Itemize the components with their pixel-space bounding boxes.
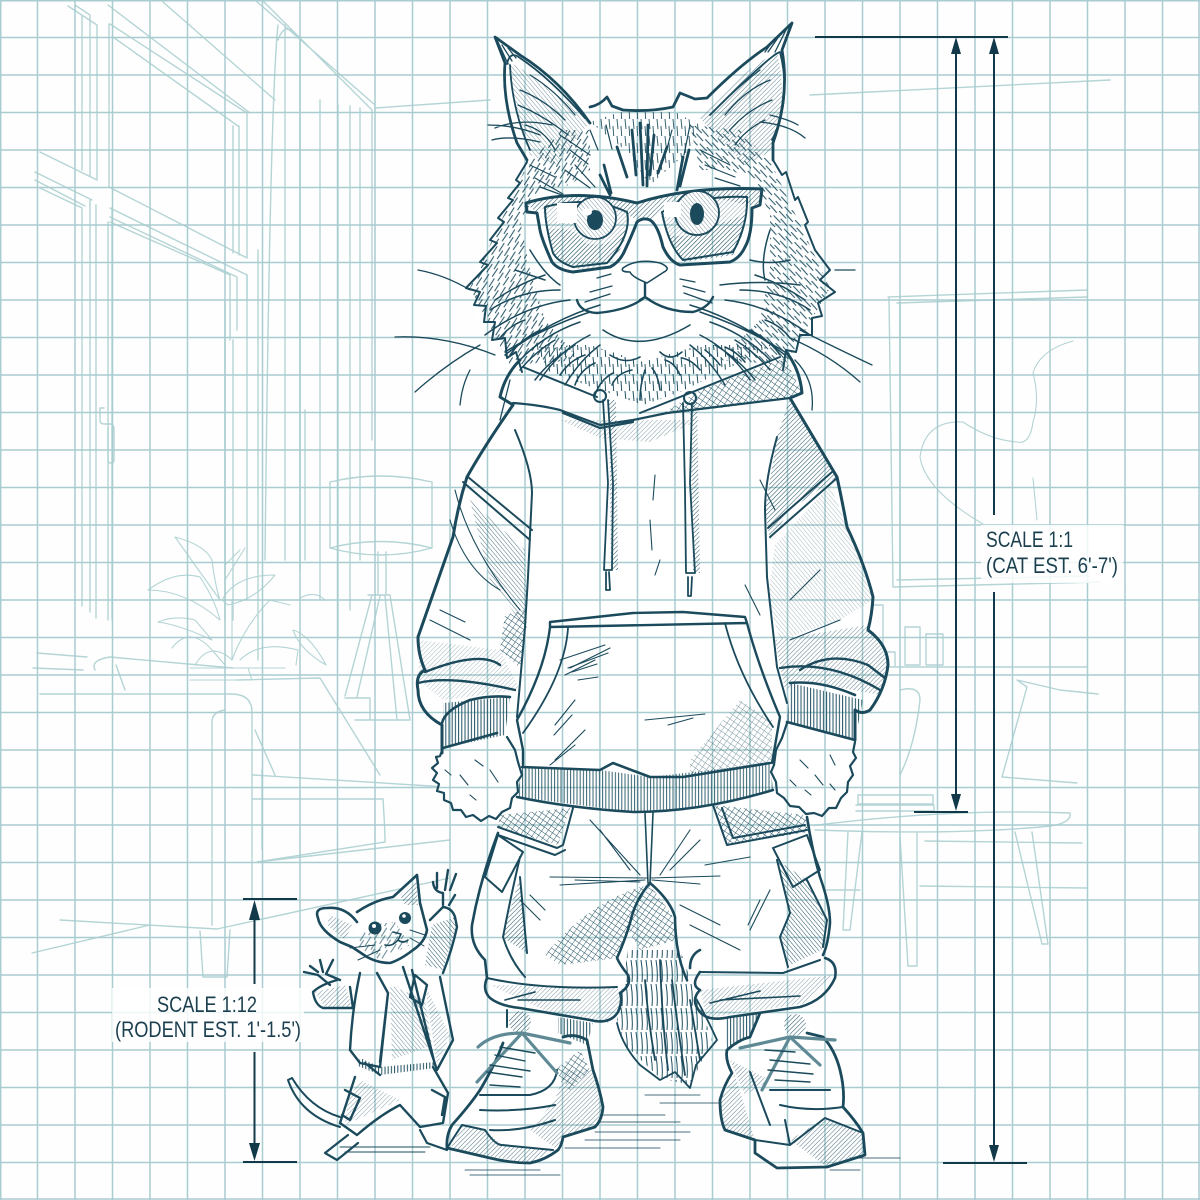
cheek fur strokes [485,230,810,385]
rodent jacket [350,967,453,1075]
bushy tail [617,960,717,1088]
head outline and ears [495,23,792,160]
label: rodent scale [115,992,301,1042]
floor lamp [330,476,432,720]
label: rodent scale: SCALE 1:12 [157,992,257,1017]
right sneaker [720,1013,865,1168]
label: cat scale: (CAT EST. 6'-7') [986,553,1118,578]
rodent height dimension lines [243,899,297,1162]
long whiskers [395,115,872,420]
fur shading [470,52,830,405]
sofa [32,653,450,977]
muzzle [585,274,712,303]
curtain [225,0,1110,660]
label backing panels [112,525,1123,1042]
rodent raised hand [430,870,457,973]
cuffs [442,682,855,748]
arrowheads [951,37,999,1162]
floor shadows [465,1095,900,1175]
rodent arrowheads [249,900,260,1161]
label: rodent scale: (RODENT EST. 1'-1.5') [115,1017,301,1042]
hoodie [417,353,888,821]
large cat figure [395,23,900,1175]
small rodent figure [288,870,457,1160]
forehead stripes [600,123,689,195]
white figure backings [288,23,888,1168]
rodent waving hand [304,960,340,985]
rodent feet [325,1130,447,1160]
paws [432,723,856,821]
label: cat scale [986,527,1118,578]
hem [517,763,773,812]
sunglasses [526,189,762,272]
rodent tail [288,1078,340,1127]
potted plant [148,537,326,680]
label: cat scale: SCALE 1:1 [986,527,1073,552]
cargo pants [472,805,836,1085]
left sneaker [447,1010,603,1163]
side furniture [810,605,1098,966]
kangaroo pocket [517,612,780,765]
wall art [888,290,1100,587]
rodent sleeve [313,980,353,1008]
eyes behind lenses [557,191,719,239]
chest fur [560,347,745,400]
cat head [395,23,872,420]
jagged fur outline [466,160,835,372]
mouth and chin [577,283,713,313]
crotch wrinkles [520,820,770,950]
rodent trousers [340,1067,448,1135]
window frame [35,2,275,620]
background room sketch [32,0,1110,977]
cat height dimension lines [815,37,1027,1163]
drawstrings [594,390,700,596]
hoodie shading [418,358,888,812]
hood collar [513,398,790,428]
